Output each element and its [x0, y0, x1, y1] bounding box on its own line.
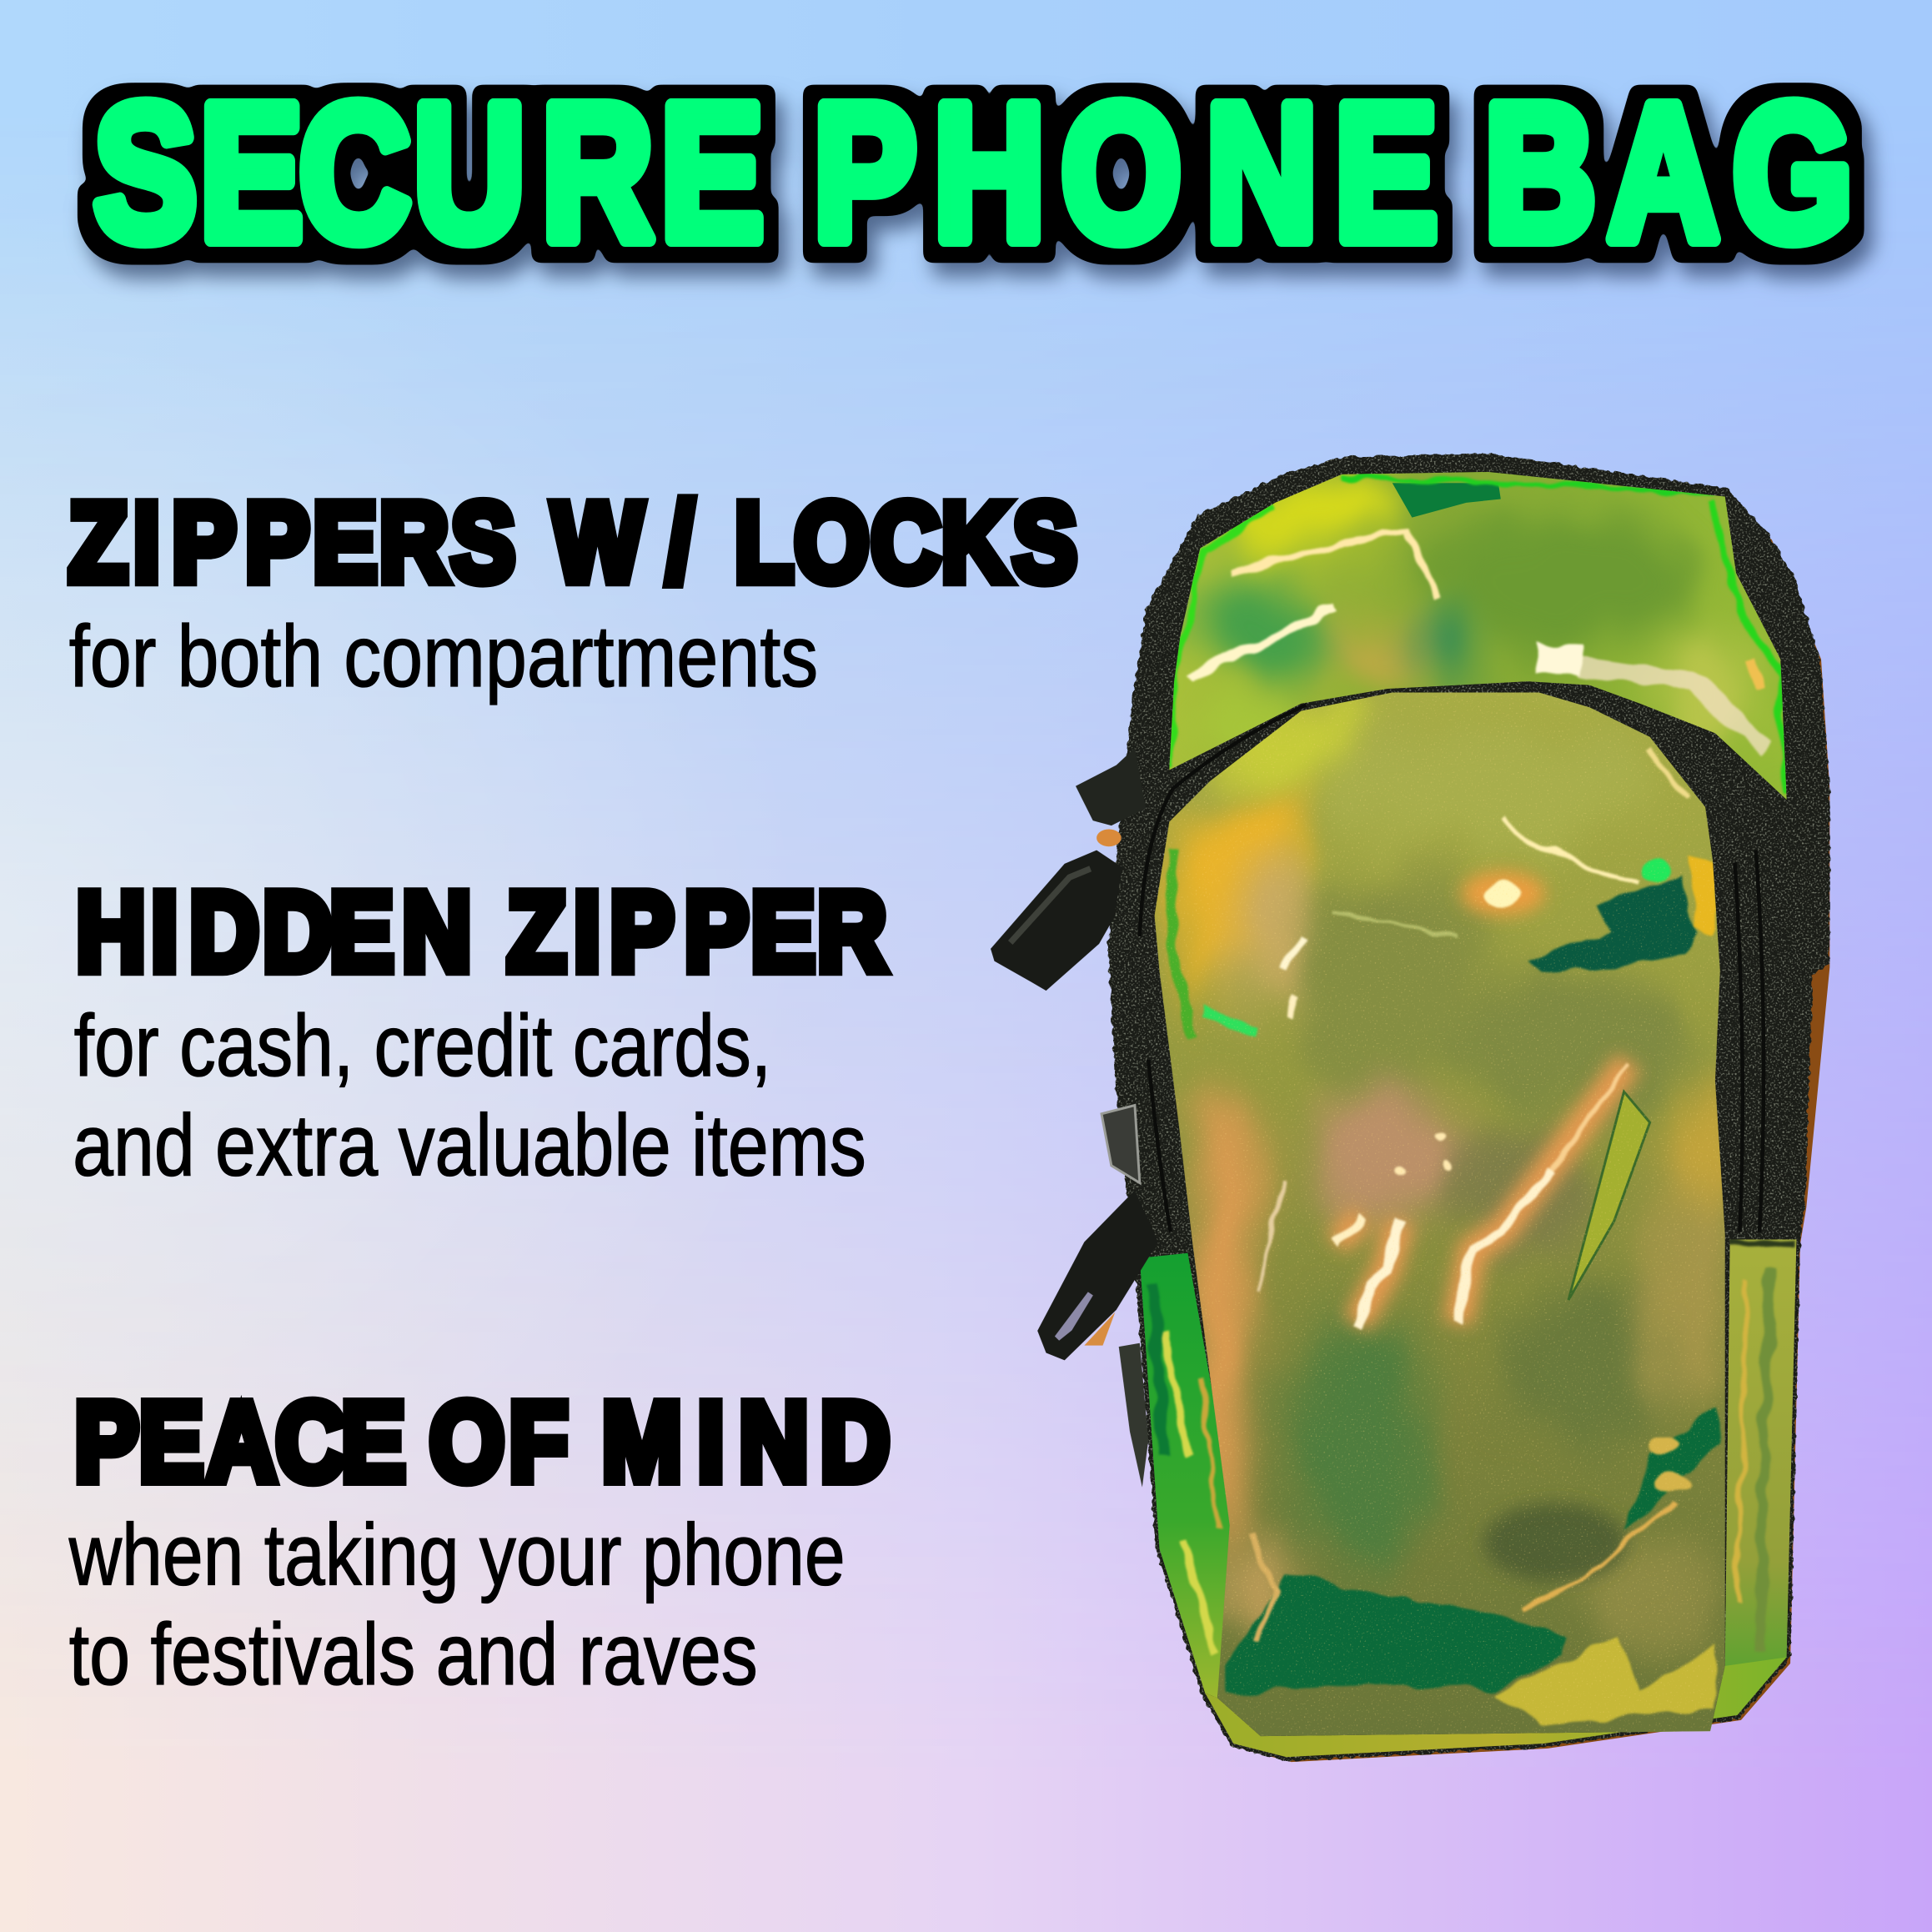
zipper teeth [1140, 705, 1764, 1232]
product photo: iridescent green phone bag [991, 457, 1829, 1762]
text: and extra valuable items: and extra valuable items [73, 1097, 866, 1195]
bright highlights [1171, 748, 1690, 1643]
front compartment [1155, 690, 1731, 1738]
flower-shaped reflection, lower right [1624, 1408, 1720, 1534]
text: when taking your phone: when taking your phone [68, 1506, 846, 1603]
wide orange glow behind creases [1337, 871, 1628, 1323]
text: to festivals and raves: to festivals and raves [69, 1606, 758, 1704]
zipper pull: top small [1076, 748, 1146, 825]
fine sparkle on the film [1158, 690, 1731, 1738]
zipper pull: upper buckle [991, 829, 1122, 991]
gold reflection, bottom [1498, 1638, 1718, 1726]
feature: peace of mind [68, 1379, 890, 1704]
text: for cash and credit cards: for cash, credit cards, [74, 997, 771, 1095]
back panel colour wash [1189, 475, 1762, 749]
feature: zippers with locks [68, 479, 1077, 705]
bottom band [1205, 1657, 1787, 1757]
bag silhouette with black zipper band [1112, 457, 1826, 1757]
back panel highlights [1169, 475, 1787, 796]
heading: hidden zipper: HIDDEN ZIPPER [76, 869, 886, 995]
heading: zippers w/ locks: ZIPPERS W/ LOCKS [68, 479, 1077, 605]
front panel colour wash [1171, 695, 1723, 1651]
heading: peace of mind: PEACE OF MIND [74, 1379, 890, 1504]
zipper pull: silver slider [1101, 1105, 1140, 1183]
title: Secure Phone Bag: SECURE PHONE BAG [94, 65, 1853, 281]
zipper cord end [1119, 1343, 1148, 1488]
orange edge behind the bag [1244, 499, 1829, 1762]
zipper pull: lower buckle [1037, 1190, 1158, 1360]
dark green reflection, bottom [1225, 1573, 1568, 1693]
dark green reflection, upper right [1525, 875, 1700, 973]
lower right side strip [1725, 1240, 1796, 1700]
text: for both compartments: for both compartments [69, 608, 818, 705]
dark ellipse, lower right [1483, 1503, 1627, 1582]
gold crease, upper right [1690, 860, 1715, 934]
dark green reflection, back panel [1393, 483, 1501, 518]
folded green-gold crease [1568, 1091, 1650, 1300]
back compartment [1169, 472, 1787, 800]
lower left side strip [1140, 1253, 1236, 1698]
feature: hidden zipper [73, 869, 886, 1195]
